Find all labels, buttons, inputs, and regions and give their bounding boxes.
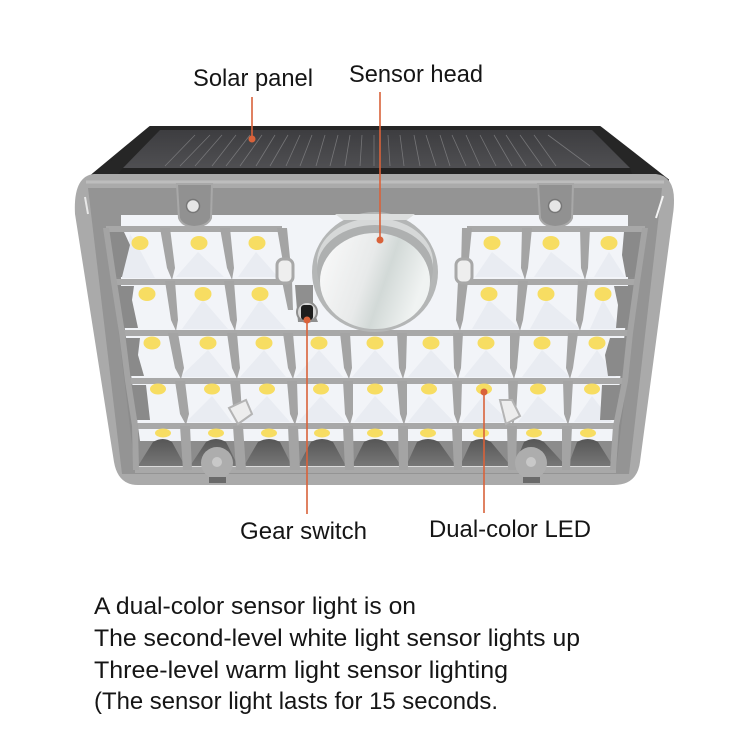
description text block: (The sensor light lasts for 15 seconds. (94, 688, 498, 715)
description text block: The second-level white light sensor lights up (94, 625, 580, 652)
callout: solar panel (193, 65, 313, 142)
grey body (75, 174, 674, 485)
illustration: solar sensor light (75, 127, 674, 485)
callout: solar panel: Solar panel (193, 65, 313, 92)
callout: gear switch (240, 316, 367, 545)
left shadow (110, 232, 150, 420)
right shadow (600, 232, 642, 420)
solar panel housing (86, 127, 668, 180)
description text block: A dual-color sensor light is on (94, 593, 416, 620)
LED chips (132, 236, 618, 438)
reflector cells (110, 232, 642, 422)
callout: dual-color LED: Dual-color LED (429, 516, 591, 543)
screws and clips (177, 184, 573, 483)
LED grid frame (103, 228, 648, 470)
sensor head (312, 212, 438, 332)
callout: sensor head (349, 61, 483, 244)
white reflector area (121, 215, 628, 441)
callout: gear switch: Gear switch (240, 518, 367, 545)
bottom row dark recesses (138, 439, 613, 467)
description text block: Three-level warm light sensor lighting (94, 657, 508, 684)
callout: dual-color LED (429, 388, 591, 543)
description text block (94, 593, 580, 715)
gear switch (295, 285, 318, 322)
inner frame band (106, 226, 645, 470)
callout: sensor head: Sensor head (349, 61, 483, 88)
